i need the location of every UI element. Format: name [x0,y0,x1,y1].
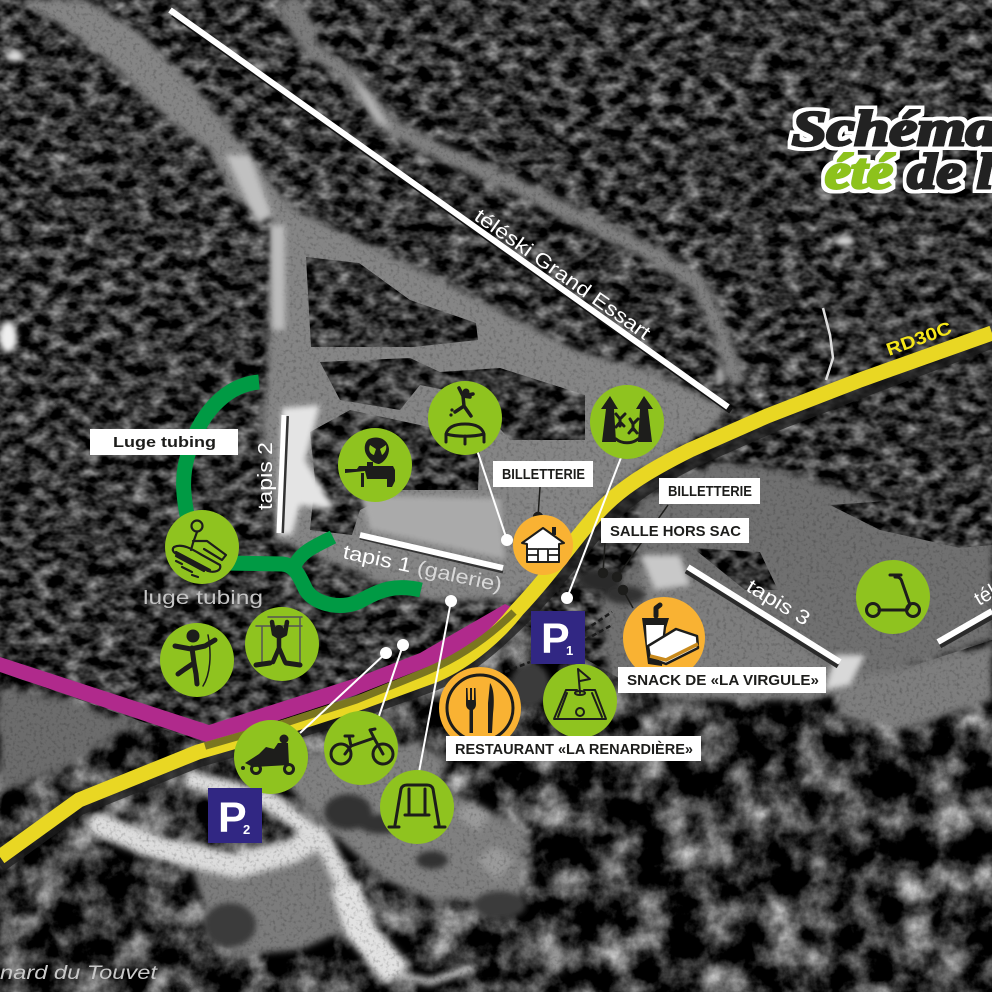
parking P2: P [218,794,247,842]
tapis 2 line [279,415,287,533]
purple road section [0,604,517,743]
label: restaurant [446,736,701,761]
label: salle hors sac [601,518,749,543]
icon: cabin (billetterie) [513,515,573,575]
luge tubing caption: luge tubing [143,588,263,609]
icon: paintball [338,428,412,502]
icon: restaurant [439,667,521,749]
title [792,100,992,199]
parking P1: P [541,615,570,663]
luge tubing track [184,382,421,605]
label: billetterie left: BILLETTERIE [502,466,585,483]
label: billetterie right [659,478,760,504]
right téléski line [938,611,992,646]
icon: luge tubing [165,510,239,584]
icon: scooter [856,560,930,634]
label: snack [618,667,826,693]
icon: snack [623,597,705,679]
icon: swing [380,770,454,844]
téléski Grand Essart label: téléski Grand Essart [470,205,655,345]
icon: kart [234,720,308,794]
icon: trampoline [428,381,502,455]
tapis 1 label: tapis 1 (galerie) [341,541,504,597]
tapis 3 label: tapis 3 [742,575,814,630]
parking P1: 1 [566,643,573,658]
label: restaurant: RESTAURANT «LA RENARDIÈRE» [455,741,693,758]
téléski Grand Essart line [170,10,731,411]
parking P2 [208,788,262,843]
icon: balance bike [324,711,398,785]
tapis 2 label: tapis 2 [255,442,277,510]
icon: mini golf [543,664,617,738]
connector lines [300,450,622,772]
parking P1 [531,611,585,664]
label: billetterie right: BILLETTERIE [668,483,752,500]
yellow road RD30C [0,333,992,865]
parking P2: 2 [243,822,250,837]
title: Schéma [792,100,992,156]
photo credit: nard du Touvet [0,963,158,984]
tapis 3 line [686,567,840,666]
label: luge tubing [90,429,238,455]
icon: rope course [245,607,319,681]
label: luge tubing: Luge tubing [113,434,216,451]
RD30C label: RD30C [884,318,954,360]
icon: jumper [160,623,234,697]
title: été de l [825,143,992,199]
label: billetterie left [493,461,593,487]
icon: inflatable castle [590,385,664,459]
tapis 1 line [360,535,503,572]
label: salle hors sac: SALLE HORS SAC [610,523,741,540]
label: snack: SNACK DE «LA VIRGULE» [627,672,819,689]
dark pointer lines [534,487,668,608]
